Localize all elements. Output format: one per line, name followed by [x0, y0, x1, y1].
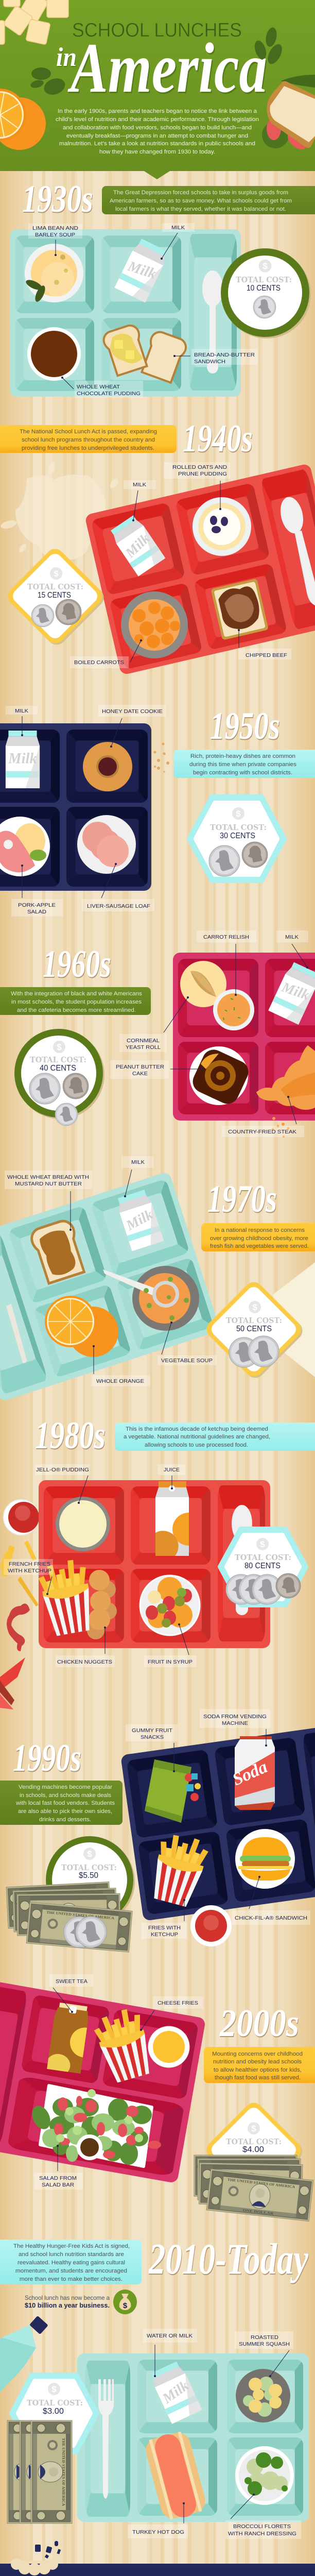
label: water or milk: WATER OR MILK — [147, 2333, 192, 2339]
cost badge 2000s — [194, 2099, 313, 2221]
intro text: child’s level of nutrition and their academic performance. Through legislation — [56, 116, 259, 123]
teal tray 1970s — [0, 1171, 220, 1402]
dollar bills: ONE DOLLAR — [242, 2208, 274, 2216]
fries in box — [36, 1557, 97, 1637]
label: bread: MUSTARD NUT BUTTER — [15, 1181, 82, 1187]
stat: 10 billion: School lunch has now become a — [25, 2294, 110, 2301]
boiled carrots — [121, 591, 188, 658]
carrot relish — [213, 989, 254, 1030]
milk carton — [115, 1189, 164, 1251]
label: chick-fil-a — [232, 1876, 310, 1925]
text box 1960s: in most schools, the student population increases — [11, 999, 142, 1005]
label: squash: ROASTED — [251, 2334, 278, 2341]
label: milk — [161, 223, 195, 260]
label: carrot relish — [197, 930, 256, 996]
text box 2010: reevaluated. Healthy eating gains cultural — [18, 2260, 125, 2266]
section: 1980s — [0, 1414, 315, 1709]
bread with mustard nut butter — [29, 1218, 87, 1284]
milk carton: Milk — [8, 750, 37, 767]
dollar bills — [7, 2420, 72, 2523]
ketchup bottle — [0, 1657, 25, 1709]
text box 1950s: Rich, protein-heavy dishes are common — [190, 753, 295, 759]
label: broccoli — [225, 2494, 301, 2539]
label: bread: SANDWICH — [194, 359, 225, 365]
cheese cup — [148, 2026, 189, 2067]
label: jello: JELL-O® PUDDING — [36, 1467, 89, 1473]
label: hot dog: TURKEY HOT DOG — [132, 2529, 184, 2535]
stray fries — [0, 1540, 39, 1606]
intro text — [56, 108, 259, 155]
cost badge 1990s: $5.50 — [79, 1871, 98, 1880]
ketchup cup — [190, 1905, 232, 1946]
label: fries: KETCHUP — [151, 1931, 178, 1938]
label: jello — [35, 1464, 90, 1504]
cost badge 1970s: 50 CENTS — [236, 1325, 272, 1333]
peanut butter cake — [189, 1046, 252, 1108]
dollar bills and quarters — [6, 1882, 132, 1952]
chicken sandwich — [235, 1829, 295, 1889]
text box 1990s: Vending machines become popular — [19, 1784, 112, 1790]
text box 1980s: allowing schools to use processed food. — [145, 1442, 248, 1448]
title: in — [56, 43, 77, 72]
ketchup cup — [4, 1500, 39, 1535]
cost badge 1970s: $ — [252, 1302, 257, 1312]
label: cheese fries — [140, 1996, 203, 2031]
text box 2010: more than ever to make better choices. — [20, 2276, 122, 2282]
juice carton — [155, 1481, 189, 1556]
label: milk — [121, 1156, 153, 1197]
label: cornmeal: CORNMEAL — [127, 1038, 160, 1044]
honey date cookie — [83, 742, 132, 791]
spoon — [277, 495, 315, 605]
text box 1990s: are also able to pick their own sides, — [18, 1808, 112, 1815]
dollar bills — [194, 2155, 313, 2221]
text box 1990s: in schools, and schools make deals — [20, 1792, 112, 1799]
text box 1970s: In a national response to concerns — [215, 1227, 305, 1233]
label: squash — [235, 2331, 293, 2377]
crumbs — [35, 2541, 61, 2558]
sandwich — [262, 75, 315, 153]
label: water or milk — [143, 2329, 197, 2377]
heading 1940s: 1940s — [183, 417, 253, 460]
text box 1960s: With the integration of black and white Americans — [11, 991, 143, 997]
leaves — [30, 26, 285, 97]
cost badge 1930s: 10 CENTS — [247, 284, 281, 293]
label: liver — [82, 863, 154, 911]
text box 1990s: with local fast food vendors. Students — [15, 1800, 115, 1806]
teal tray 2010 — [77, 2353, 309, 2523]
label: carrots — [70, 639, 142, 668]
dollar bills: THE UNITED STATES OF AMERICA — [61, 2438, 65, 2506]
text box 1930s: The Great Depression forced schools to take in surplus goods from — [113, 190, 288, 196]
fork — [98, 2379, 114, 2499]
text box 2000s: though fast food was still served. — [215, 2075, 301, 2081]
gummy fruit snacks — [145, 1759, 201, 1823]
cost badge 1960s: TOTAL COST: — [30, 1055, 86, 1064]
heading 1990s: 1990s — [13, 1737, 81, 1780]
label: bread — [173, 349, 258, 365]
cost badge 1940s — [4, 545, 108, 649]
label: milk: MILK — [133, 482, 146, 488]
label: squash: SUMMER SQUASH — [239, 2341, 290, 2347]
text box 1950s: begin contracting with school districts. — [193, 770, 292, 776]
label: steak — [222, 1096, 304, 1137]
label: french fries: WITH KETCHUP — [8, 1568, 51, 1574]
label: salad: SALAD FROM — [39, 2175, 77, 2181]
label: fruit: FRUIT IN SYRUP — [148, 1659, 192, 1665]
bread and butter — [101, 323, 188, 383]
label: cookie — [98, 705, 166, 748]
section: 1960s — [0, 930, 315, 1138]
label: lima bean: LIMA BEAN AND — [32, 225, 78, 231]
fries in box — [146, 1830, 211, 1909]
roasted squash — [236, 2369, 290, 2422]
cookie crumbs — [153, 743, 169, 773]
stat: 10 billion: $10 billion a year business. — [25, 2302, 110, 2309]
text box 2010: momentum, and students are encouraged — [15, 2268, 127, 2274]
label: milk — [124, 480, 156, 521]
milk carton: Milk — [159, 2378, 191, 2407]
cost badge 1960s: $ — [57, 1042, 62, 1052]
label: sweet tea: SWEET TEA — [56, 1978, 87, 1985]
country fried steak — [256, 1045, 315, 1110]
label: broccoli: WITH RANCH DRESSING — [228, 2531, 296, 2537]
cookie bite — [11, 2558, 58, 2575]
label: salad: SALAD BAR — [42, 2182, 74, 2188]
label: oats: PRUNE PUDDING — [178, 471, 227, 477]
milk carton: Milk — [126, 258, 159, 282]
soda can: Soda — [230, 1757, 270, 1789]
label: bread: BREAD-AND-BUTTER — [194, 352, 255, 358]
heading 1980s: 1980s — [35, 1414, 106, 1457]
napkin — [273, 1262, 315, 1377]
crimson tray 1960s — [173, 953, 315, 1121]
cost badge 1940s: 15 CENTS — [38, 591, 71, 600]
chipped beef — [211, 579, 269, 640]
section: 1990s — [0, 1709, 315, 1952]
whole orange — [45, 1296, 118, 1357]
milk splash — [0, 461, 120, 560]
red tray 1940s — [84, 463, 315, 675]
fries in box — [91, 2006, 156, 2085]
label: peanut butter cake: PEANUT BUTTER — [116, 1064, 164, 1070]
heading 1970s: 1970s — [207, 1178, 277, 1221]
text box 1970s: fresh fish and vegetables were served. — [210, 1243, 309, 1249]
text box 1960s — [0, 987, 151, 1015]
text box 1930s — [102, 186, 315, 214]
navy tray 1990s — [120, 1723, 315, 1921]
label: bread: WHOLE WHEAT BREAD WITH — [7, 1174, 89, 1180]
cost badge 1990s — [6, 1836, 135, 1952]
text box 1930s: local farmers is what they served, whether it was balanced or not. — [115, 206, 286, 212]
label: liver: LIVER-SAUSAGE LOAF — [87, 903, 150, 909]
milk carton — [109, 514, 165, 577]
cost badge 1940s: $ — [54, 569, 59, 579]
milk carton: Milk — [122, 531, 153, 561]
milk carton — [114, 238, 170, 302]
label: carrots: BOILED CARROTS — [74, 659, 124, 666]
label: carrot relish: CARROT RELISH — [203, 934, 249, 940]
header panel — [0, 0, 315, 179]
oats bowl — [192, 497, 251, 556]
text box 2000s: to allow healthier options for kids, — [214, 2067, 302, 2073]
text box 1940s: school lunch programs throughout the country and — [22, 437, 155, 443]
broccoli florets — [235, 2446, 294, 2505]
label: cornmeal — [119, 996, 189, 1052]
cost badge 1960s — [14, 1029, 104, 1126]
milk carton — [149, 2360, 202, 2424]
label: juice — [157, 1464, 185, 1489]
cost badge 1950s — [189, 797, 284, 880]
cost badge 1930s: $ — [262, 261, 268, 271]
text box 2010: and school lunch nutrition standards are — [19, 2251, 124, 2258]
cornmeal roll — [180, 961, 226, 1007]
sweet tea carton — [47, 2002, 90, 2074]
intro text: how they have changed from 1930 to today. — [99, 149, 215, 155]
text box 1990s — [0, 1781, 122, 1825]
label: pork apple: SALAD — [27, 909, 46, 915]
cost badge 2010: $3.00 — [43, 2407, 64, 2416]
icon: money bag: $ — [123, 2301, 128, 2310]
cost badge 2000s: $4.00 — [242, 2145, 264, 2154]
intro text: malnutrition. Let’s take a look at nutrition standards in public schools and — [59, 141, 255, 147]
teal tray 1930s — [10, 229, 241, 397]
label: milk: MILK — [15, 708, 28, 714]
icon: money bag — [113, 2290, 137, 2314]
pork apple salad — [0, 817, 50, 876]
label: pork apple — [11, 865, 63, 917]
label: juice: JUICE — [164, 1467, 180, 1473]
label: oats: ROLLED OATS AND — [172, 464, 227, 470]
label: milk: MILK — [171, 225, 185, 231]
label: nuggets: CHICKEN NUGGETS — [57, 1659, 112, 1665]
label: bread — [5, 1171, 92, 1231]
label: salad — [34, 2145, 83, 2190]
label: milk: MILK — [285, 934, 299, 940]
label: cookie: HONEY DATE COOKIE — [102, 708, 163, 715]
text box 2000s: Mounting concerns over childhood — [212, 2051, 303, 2057]
text box 2000s: nutrition and obesity lead schools — [213, 2059, 302, 2065]
label: soda: SODA FROM VENDING — [203, 1714, 267, 1720]
label: gummy: GUMMY FRUIT — [132, 1727, 173, 1734]
section: 1930s — [10, 178, 315, 398]
label: cornmeal: YEAST ROLL — [126, 1044, 161, 1050]
label: broccoli: BROCCOLI FLORETS — [233, 2523, 291, 2530]
milk carton — [268, 961, 315, 1025]
cost badge 1990s: TOTAL COST: — [61, 1863, 117, 1872]
label: lima bean — [28, 224, 82, 256]
label: steak: COUNTRY-FRIED STEAK — [228, 1129, 296, 1135]
milk carton: Milk — [123, 1207, 156, 1234]
soda can — [230, 1736, 275, 1810]
cost badge 1930s — [221, 248, 311, 338]
label: milk — [276, 930, 308, 969]
heading 1950s: 1950s — [210, 705, 280, 748]
vegetable soup — [103, 1266, 199, 1331]
section: 1970s — [0, 1156, 315, 1402]
label: orange — [91, 1345, 150, 1386]
label: nuggets — [56, 1626, 115, 1667]
chocolate pudding — [27, 327, 81, 381]
soup bowl — [25, 244, 83, 303]
text box 1940s: providing free lunches to underprivileged students. — [22, 445, 154, 451]
label: cheese fries: CHEESE FRIES — [157, 2000, 198, 2006]
label: french fries — [4, 1559, 53, 1595]
title — [56, 20, 267, 107]
water bottle — [0, 2316, 48, 2392]
cost badge 1990s: $ — [87, 1849, 92, 1859]
dollar bills and quarters: THE UNITED STATES OF AMERICA — [46, 1910, 114, 1920]
dollar bills: THE UNITED STATES OF AMERICA — [227, 2178, 295, 2189]
text box 1950s: during this time when private companies — [189, 761, 297, 768]
label: beef — [238, 629, 291, 659]
cost badge 1980s: TOTAL COST: — [235, 1553, 291, 1562]
label: fries: FRIES WITH — [148, 1925, 181, 1931]
text box 1940s — [0, 425, 177, 453]
cost badge 2010: $ — [51, 2384, 57, 2394]
turkey hot dog — [143, 2429, 208, 2523]
label: lima bean: BARLEY SOUP — [35, 232, 75, 238]
red tray 1980s — [36, 1480, 270, 1648]
label: french fries: FRENCH FRIES — [9, 1561, 50, 1567]
heading 1960s: 1960s — [43, 943, 111, 986]
cost badge 2000s: TOTAL COST: — [226, 2137, 282, 2146]
fruit in syrup — [140, 1575, 200, 1635]
cost badge 1970s: TOTAL COST: — [226, 1316, 282, 1325]
cost badge 1930s: TOTAL COST: — [236, 275, 292, 284]
cost badge 1940s: TOTAL COST: — [27, 582, 83, 591]
label: beef: CHIPPED BEEF — [246, 652, 287, 658]
label: gummy: SNACKS — [141, 1734, 164, 1740]
section: 1950s — [0, 705, 315, 917]
orange — [0, 89, 46, 150]
intro text: and collaboration with food vendors, schools began to build lunch—and — [63, 125, 252, 131]
cost badge 1950s: 30 CENTS — [220, 832, 255, 840]
spoon — [232, 1505, 252, 1615]
text box 1930s: American farmers, so as to save money. What schools could get from — [110, 198, 292, 204]
cost badge 2000s: $ — [251, 2124, 256, 2133]
section: 2010-Today — [0, 2235, 309, 2539]
text box 1980s — [115, 1422, 315, 1451]
ketchup squiggle — [7, 1603, 30, 1651]
left spoon — [6, 1304, 27, 1363]
label: orange: WHOLE ORANGE — [96, 1378, 144, 1384]
label: milk: MILK — [131, 1159, 145, 1165]
label: soup: VEGETABLE SOUP — [161, 1358, 213, 1364]
text box 1940s: The National School Lunch Act is passed, expanding — [20, 429, 157, 435]
cost badge 1980s: $ — [260, 1539, 265, 1549]
text box 1970s: over growing childhood obesity, more — [210, 1235, 308, 1242]
jello pudding — [56, 1497, 110, 1551]
nuggets — [87, 1570, 117, 1639]
cost badge 2010: TOTAL COST: — [27, 2398, 83, 2408]
cost badge 1950s: TOTAL COST: — [210, 823, 267, 832]
heading 2000s: 2000s — [219, 2002, 299, 2045]
label: hot dog — [128, 2502, 188, 2538]
label: pudding — [61, 377, 143, 398]
cost badge 1970s — [203, 1278, 306, 1382]
label: pudding: CHOCOLATE PUDDING — [77, 391, 141, 397]
cost badge 2010 — [7, 2375, 97, 2523]
text box 1990s: drinks and desserts. — [39, 1817, 91, 1823]
cost badge 1980s — [220, 1529, 306, 1605]
label: soup — [157, 1321, 217, 1365]
crimson tray 2000s — [0, 1978, 206, 2183]
label: gummy — [126, 1724, 178, 1772]
navy tray 1950s — [0, 723, 151, 891]
text box 1970s — [201, 1223, 315, 1251]
label: pork apple: PORK-APPLE — [18, 902, 56, 908]
label: chick-fil-a: CHICK-FIL-A® SANDWICH — [235, 1915, 307, 1921]
text box 1960s: and the cafeteria becomes more streamlined. — [17, 1007, 136, 1013]
intro text: In the early 1900s, parents and teachers began to notice the link between a — [58, 108, 257, 114]
crackers — [0, 0, 68, 45]
spoon — [202, 270, 223, 374]
label: peanut butter cake: CAKE — [132, 1071, 148, 1077]
label: oats — [164, 462, 230, 510]
label: pudding: WHOLE WHEAT — [77, 384, 120, 390]
stat: 10 billion — [25, 2290, 137, 2314]
cost badge 1960s: 40 CENTS — [40, 1064, 76, 1073]
label: fruit — [144, 1623, 197, 1667]
label: fries — [141, 1899, 187, 1939]
text box 1980s: This is the infamous decade of ketchup being deemed — [126, 1426, 268, 1432]
text box 1980s: a vegetable. National nutritional guidelines are changed, — [124, 1434, 270, 1440]
heading 1930s: 1930s — [22, 178, 93, 221]
label: milk — [6, 706, 38, 736]
text box 2010 — [0, 2240, 142, 2284]
label: peanut butter cake — [110, 1060, 204, 1079]
text box 2010: The Healthy Hunger-Free Kids Act is signed, — [13, 2243, 130, 2249]
milk carton: Milk — [279, 979, 311, 1004]
cost badge 1950s: $ — [236, 809, 241, 819]
label: soda — [200, 1709, 270, 1747]
section: 2000s — [0, 1974, 315, 2221]
text box 2000s — [204, 2047, 315, 2083]
label: soda: MACHINE — [222, 1720, 248, 1726]
title: SCHOOL LUNCHES — [72, 20, 242, 41]
title: America — [67, 28, 267, 107]
cost badge 1980s: 80 CENTS — [244, 1562, 281, 1570]
footer — [0, 2541, 315, 2576]
text box 1950s — [173, 750, 315, 778]
intro text: eventually breakfast—programs in an attempt to combat hunger and — [66, 133, 248, 139]
salad — [28, 2086, 161, 2166]
liver sausage loaf — [77, 815, 136, 874]
section: 1940s — [0, 417, 315, 675]
label: sweet tea — [49, 1974, 93, 2013]
steak crumbs — [272, 1117, 289, 1138]
milk carton — [6, 731, 40, 788]
